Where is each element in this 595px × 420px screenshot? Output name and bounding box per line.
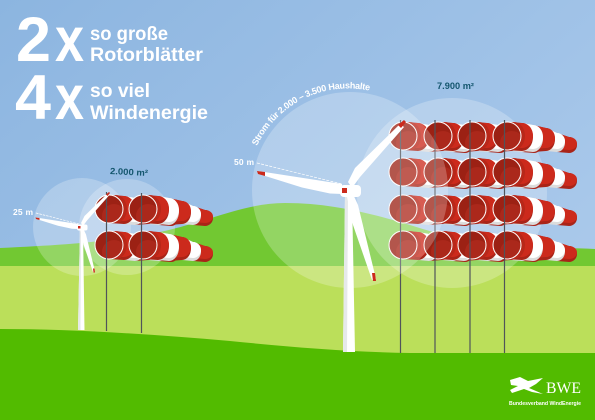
logo: BWE — [509, 377, 581, 407]
large wind turbine — [257, 120, 406, 352]
headline: 4x: Windenergie — [90, 103, 208, 124]
headline: 2x: x — [55, 5, 84, 75]
green hill — [0, 203, 595, 280]
swept area circle: large turbine — [252, 92, 448, 288]
headline: 4x — [15, 63, 208, 133]
headline: 4x: 4 — [15, 63, 51, 133]
headline — [15, 5, 208, 133]
small wind turbine — [36, 192, 110, 330]
rotor length label: 50 m: 50 m — [234, 157, 254, 167]
headline: 4x: x — [55, 63, 84, 133]
wind socks: small group — [95, 195, 213, 264]
curved label: households: Strom für 2.000 – 3.500 Haushalte — [252, 82, 370, 146]
area label: 2.000 m²: 2.000 m² — [110, 166, 148, 178]
logo icon: flag wings — [510, 377, 543, 394]
headline: 2x — [16, 5, 204, 75]
poles: large group — [400, 120, 504, 353]
dark green foreground — [0, 329, 595, 420]
rotor length label: 50 m — [234, 157, 342, 184]
wind socks: large group — [389, 122, 577, 264]
poles: small group — [106, 192, 142, 333]
area label: 7.900 m²: 7.900 m² — [437, 81, 474, 91]
rotor length label: 25 m — [13, 207, 79, 224]
headline: 4x: so viel — [90, 81, 150, 102]
rotor length label: 25 m: 25 m — [13, 207, 33, 217]
headline: 2x: Rotorblätter — [90, 45, 204, 66]
headline: 2x: so große — [90, 24, 168, 45]
swept area circle: small socks — [79, 179, 175, 275]
swept area circle: large socks — [357, 98, 547, 288]
logo: BWE: BWE — [546, 380, 581, 397]
swept area circle: small turbine — [33, 178, 131, 276]
headline: 2x: 2 — [16, 5, 51, 75]
light green meadow — [0, 266, 595, 356]
logo: BWE: Bundesverband WindEnergie — [509, 401, 581, 407]
